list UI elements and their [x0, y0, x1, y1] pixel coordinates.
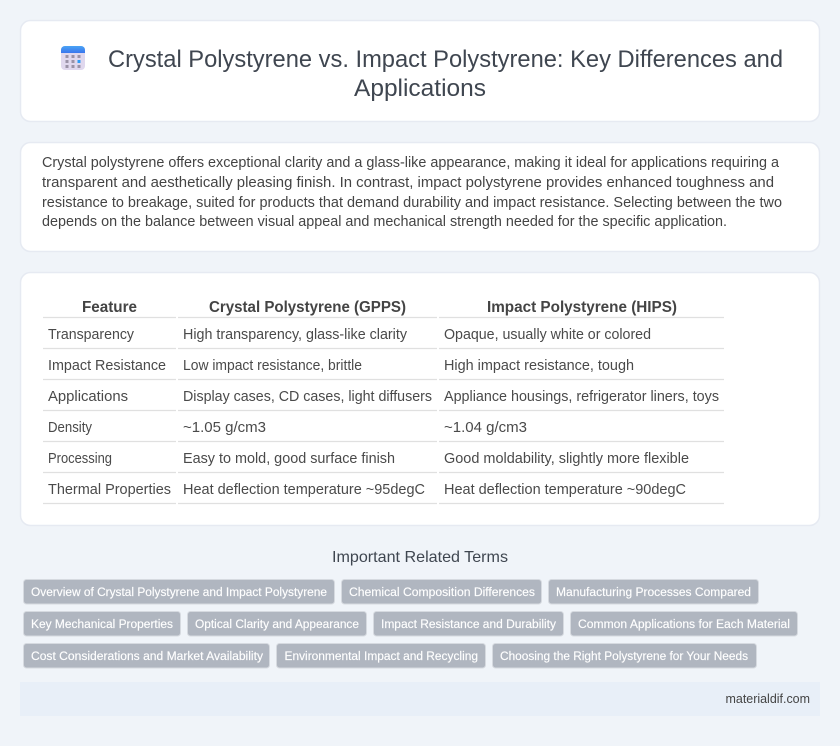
table row: impact resistance — [48, 358, 634, 374]
table row: impact resistance: Impact Resistance — [48, 358, 166, 374]
table row: transparency — [48, 327, 651, 343]
tag: impact resistance — [374, 612, 564, 636]
tag: optical clarity: Optical Clarity and Appearance — [195, 617, 359, 631]
table header: Feature — [82, 299, 137, 316]
table row: applications: Display cases, CD cases, light diffusers — [183, 389, 432, 405]
tag: overview — [24, 580, 334, 604]
table row: processing: Easy to mold, good surface finish — [183, 451, 395, 467]
table row: applications — [48, 389, 719, 405]
summary text block: resistance to breakage, suited for products that demand durability and impact resistance. Selecting between the two — [42, 195, 782, 211]
footer: materialdif.com — [726, 692, 810, 706]
tag: manufacturing — [548, 580, 758, 604]
tag: cost — [24, 644, 270, 668]
table row: processing — [48, 451, 689, 467]
tag: common applications — [570, 612, 798, 636]
tag: chemical composition — [342, 580, 542, 604]
tag: impact resistance: Impact Resistance and Durability — [381, 617, 557, 631]
panel: summary — [20, 142, 820, 252]
table row: processing: Processing — [48, 451, 112, 467]
table row: transparency: High transparency, glass-like clarity — [183, 327, 408, 343]
table row: applications: Applications — [48, 389, 128, 405]
table row: transparency: Transparency — [48, 327, 135, 343]
summary text block: transparent and aesthetically pleasing finish. In contrast, impact polystyrene provides enhanced toughness and — [42, 175, 774, 191]
table row: thermal properties: Heat deflection temperature ~90degC — [444, 482, 686, 498]
tag: choosing — [492, 644, 756, 668]
table row: density: Density — [48, 420, 93, 436]
table row: applications: Appliance housings, refrigerator liners, toys — [444, 389, 719, 405]
table row: density — [48, 420, 527, 436]
title: Applications — [354, 75, 486, 102]
title: Crystal Polystyrene vs. Impact Polystyrene: Key Differences and — [108, 46, 783, 73]
table row: thermal properties — [48, 482, 686, 498]
panel: comparison table — [20, 272, 820, 526]
table row: thermal properties: Thermal Properties — [48, 482, 171, 498]
footer — [20, 682, 820, 716]
tag: overview: Overview of Crystal Polystyrene and Impact Polystyrene — [31, 585, 327, 599]
table row: density: ~1.05 g/cm3 — [183, 420, 266, 436]
table header — [82, 299, 677, 316]
title — [108, 46, 783, 102]
table row: impact resistance: High impact resistance, tough — [444, 358, 634, 374]
tag: mechanical properties — [24, 612, 180, 636]
summary text block: Crystal polystyrene offers exceptional clarity and a glass-like appearance, making it ideal for applications requiring a — [42, 155, 779, 171]
related term tags — [24, 580, 798, 668]
icon: calendar grid — [61, 46, 85, 70]
tag: mechanical properties: Key Mechanical Properties — [31, 617, 173, 631]
table row: density: ~1.04 g/cm3 — [444, 420, 527, 436]
tag: environmental — [276, 644, 486, 668]
heading: important related terms: Important Related Terms — [332, 549, 508, 566]
table header: Impact Polystyrene (HIPS) — [487, 299, 677, 316]
table row: thermal properties: Heat deflection temperature ~95degC — [183, 482, 425, 498]
tag: optical clarity — [188, 612, 366, 636]
table header: Crystal Polystyrene (GPPS) — [209, 299, 406, 316]
table row: transparency: Opaque, usually white or colored — [444, 327, 651, 343]
panel: title card — [20, 20, 820, 122]
tag: environmental: Environmental Impact and Recycling — [284, 649, 478, 663]
table row: impact resistance: Low impact resistance, brittle — [183, 358, 362, 374]
table row: processing: Good moldability, slightly more flexible — [444, 451, 689, 467]
summary text block: depends on the balance between visual appeal and mechanical strength needed for the specific application. — [42, 214, 727, 230]
tag: manufacturing: Manufacturing Processes Compared — [556, 585, 751, 599]
tag: cost: Cost Considerations and Market Availability — [31, 649, 264, 663]
tag: choosing: Choosing the Right Polystyrene for Your Needs — [500, 649, 748, 663]
tag: chemical composition: Chemical Composition Differences — [349, 585, 535, 599]
summary text block — [42, 155, 782, 230]
tag: common applications: Common Applications for Each Material — [578, 617, 790, 631]
